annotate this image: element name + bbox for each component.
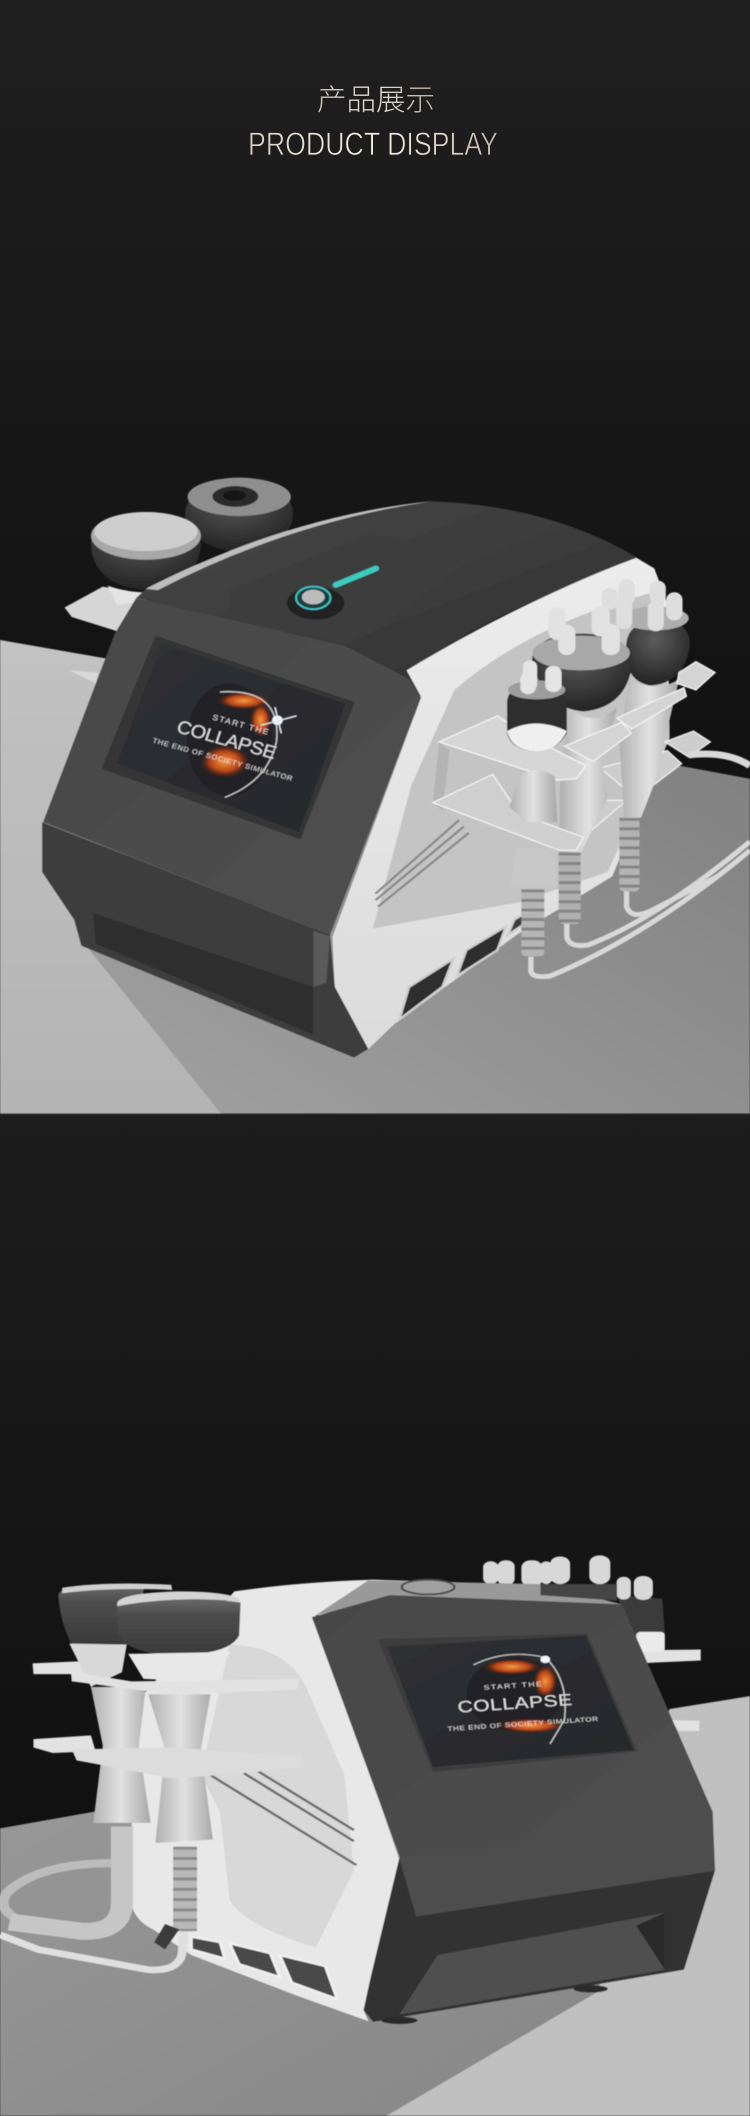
front probe head <box>507 660 567 751</box>
lower front shelf <box>72 1748 302 1779</box>
screen text <box>447 1680 598 1733</box>
round applicators behind the device <box>65 477 293 683</box>
device body <box>129 1580 715 2024</box>
lower right shelves <box>588 731 710 833</box>
dark front face <box>312 1595 715 1916</box>
middle probe <box>532 606 632 852</box>
front mid band <box>399 1825 715 1916</box>
front corner plate <box>313 931 330 987</box>
screen bezel <box>101 636 355 839</box>
upper front shelf <box>71 1671 299 1694</box>
control knob and light bar <box>287 568 376 620</box>
side recess <box>373 590 670 928</box>
front face <box>43 598 421 935</box>
feet <box>381 1985 608 2024</box>
middle probe connector <box>559 852 581 924</box>
floor: shadow side <box>0 1696 750 2116</box>
probe cables <box>531 754 750 977</box>
side vents <box>191 1937 337 1999</box>
front rack bracket <box>433 742 450 811</box>
screen text <box>151 713 294 783</box>
screen text: START THE <box>483 1680 544 1692</box>
floor: shadow side <box>0 640 750 1114</box>
device body <box>42 501 670 1058</box>
far probe collar <box>636 1632 665 1652</box>
chinese heading: 产品展示 <box>317 77 435 119</box>
back cover strip <box>540 1584 617 1601</box>
front dark band <box>42 822 368 1058</box>
lower rear shelf <box>69 670 98 683</box>
thin cable <box>0 1929 184 1970</box>
floor: light side <box>386 1696 750 2116</box>
white side shell <box>332 558 670 1049</box>
side recess shading <box>201 1645 354 1948</box>
silver top edge <box>146 501 430 590</box>
rear thick hose <box>10 1826 122 1931</box>
handle grip <box>155 1777 213 1843</box>
front applicator head <box>117 1591 241 1681</box>
page background: second panel <box>0 1114 750 2116</box>
cyan light bar <box>336 568 376 585</box>
far probe body <box>617 1595 665 1650</box>
far shelves <box>641 1649 701 1731</box>
front handle <box>148 1694 213 1843</box>
top raised panel <box>230 534 478 644</box>
screen text: THE END OF SOCIETY SIMULATOR <box>447 1715 598 1733</box>
grille <box>210 1771 356 1865</box>
top knob <box>402 1580 454 1594</box>
rear applicator <box>58 1583 172 1823</box>
recess notch <box>636 1913 665 1970</box>
page background: first panel <box>0 0 750 1114</box>
rear shelf behind device <box>65 587 143 631</box>
outer thin hose loop <box>3 1863 112 1924</box>
right probe connector <box>619 818 639 892</box>
screen glass <box>117 643 345 832</box>
screen text: START THE <box>211 713 271 737</box>
front probe handle <box>509 770 557 822</box>
screen text: COLLAPSE <box>457 1690 573 1716</box>
front applicator and cables <box>0 1583 302 1970</box>
screen bezel <box>378 1634 637 1772</box>
title block <box>248 77 498 162</box>
touch screen <box>101 636 355 839</box>
screen glass <box>387 1635 634 1767</box>
screen text: COLLAPSE <box>174 717 279 764</box>
front lower dark <box>364 1858 715 2022</box>
front probe connector <box>521 889 544 957</box>
rear probes at top right <box>483 1555 701 1731</box>
english heading: PRODUCT DISPLAY <box>248 126 498 162</box>
diagonal side grille <box>375 820 469 907</box>
planet graphic <box>466 1654 565 1744</box>
front probe grip <box>511 848 557 887</box>
top cover <box>316 1580 622 1615</box>
panel: device front-left view <box>0 477 750 1114</box>
top cover <box>136 501 637 696</box>
spiral connector <box>173 1847 197 1931</box>
touch screen <box>378 1634 637 1772</box>
front recess <box>93 913 313 1035</box>
connector port <box>154 1924 179 1950</box>
upper right shelves <box>617 662 715 729</box>
panel: device rear-right view <box>0 1555 750 2116</box>
screen text: THE END OF SOCIETY SIMULATOR <box>151 736 294 783</box>
middle upper shelf <box>564 722 631 761</box>
front lower shelf <box>433 774 584 850</box>
rack and probes on side <box>433 579 750 977</box>
white side shell <box>129 1580 622 2021</box>
front upper shelf <box>439 716 586 780</box>
right rear probe <box>602 579 690 818</box>
side vents <box>399 907 536 1019</box>
planet graphic <box>187 683 297 797</box>
rear shelf pair <box>33 1661 96 1753</box>
rear hollow applicator <box>185 477 293 551</box>
pins <box>483 1555 653 1600</box>
power knob <box>287 587 344 620</box>
front recess <box>399 1913 665 2015</box>
floor: light side <box>0 640 221 1114</box>
front flat applicator <box>91 512 201 605</box>
